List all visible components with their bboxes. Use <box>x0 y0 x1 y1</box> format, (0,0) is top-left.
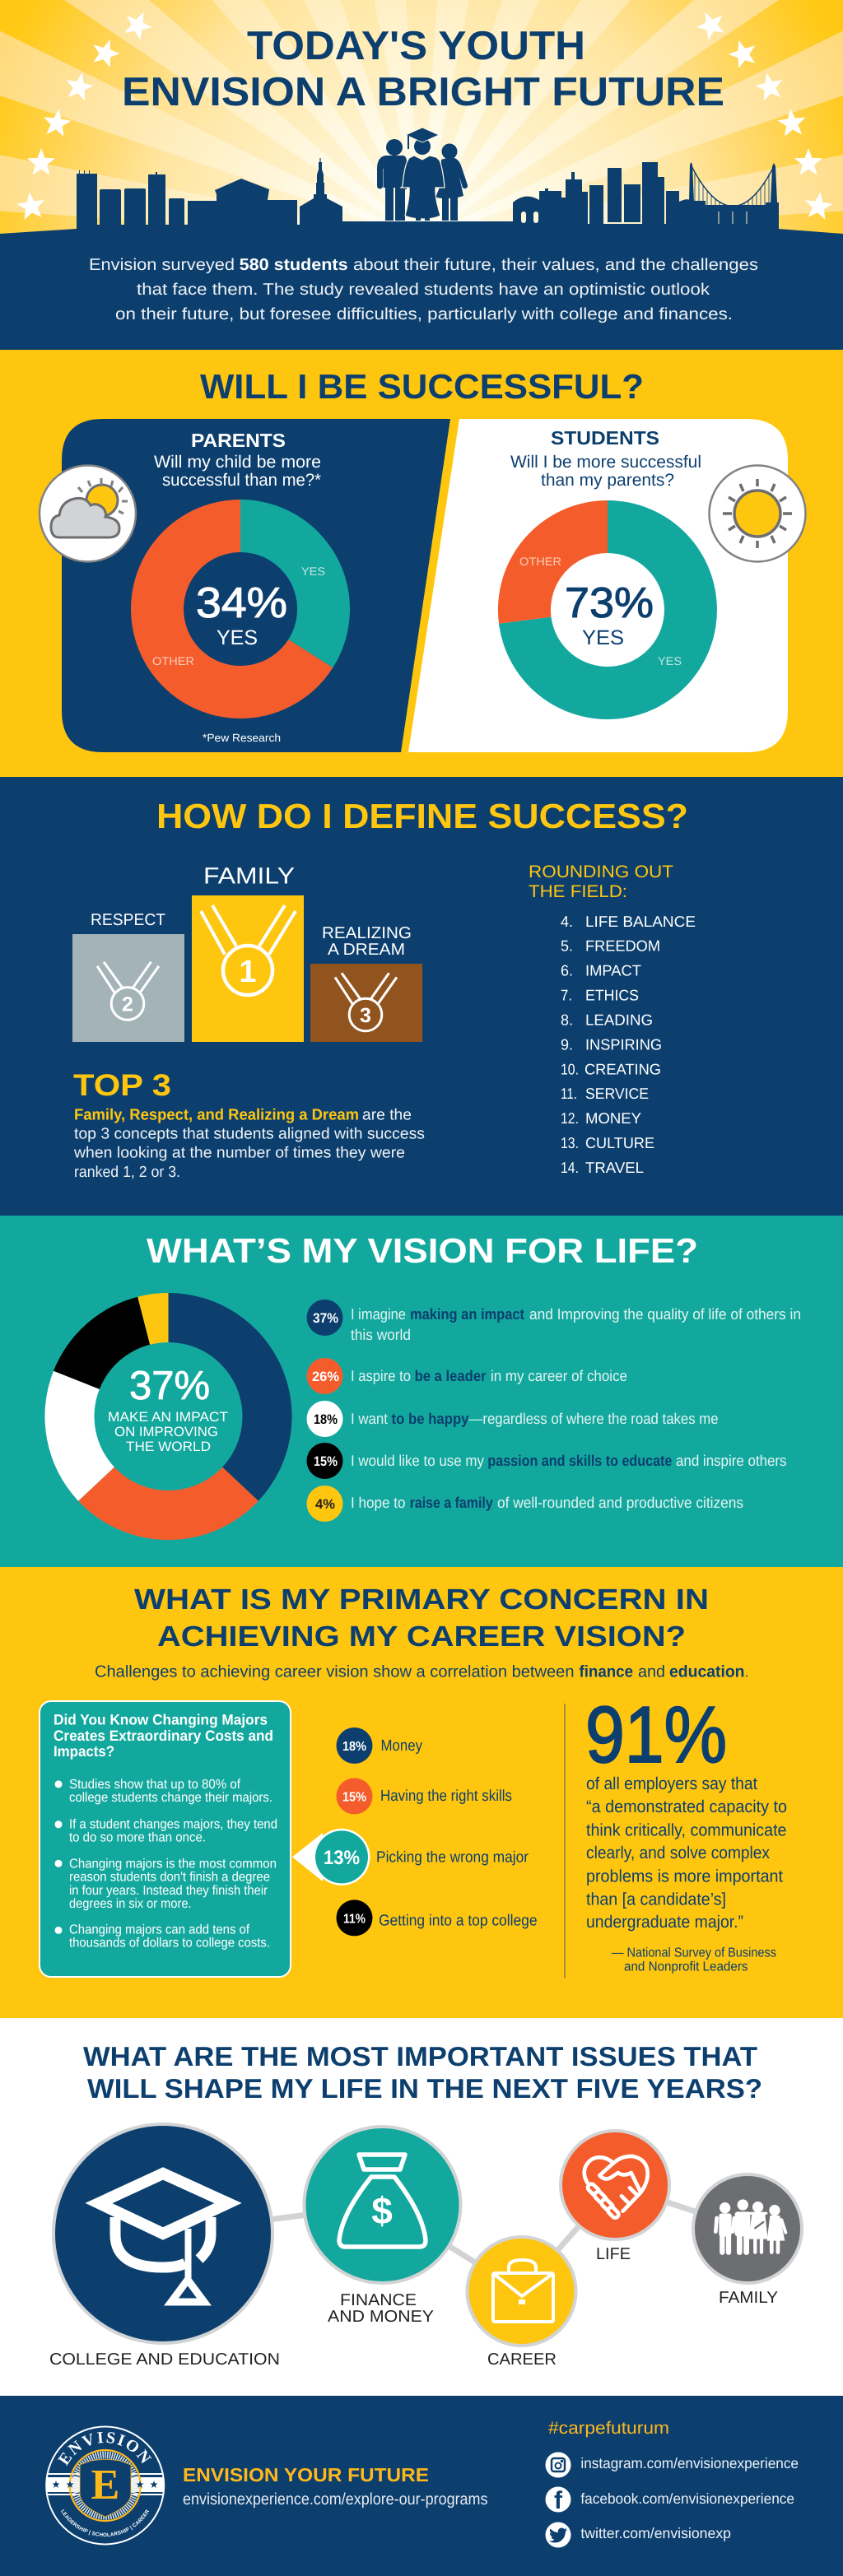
ranked list: 6. <box>561 962 573 979</box>
ranked list: SERVICE <box>585 1085 649 1102</box>
card bullets: college students change their majors. <box>69 1791 272 1805</box>
rounding out heading: THE FIELD: <box>529 882 627 901</box>
ranked list: 8. <box>561 1011 573 1029</box>
item 18% <box>306 1401 719 1437</box>
item 18%: to be happy <box>392 1410 469 1427</box>
ranked list: INSPIRING <box>585 1035 662 1053</box>
top 3 text: top 3 concepts that students aligned with success <box>74 1126 425 1142</box>
intro text: that face them. The study revealed students have an optimistic outlook <box>137 281 710 299</box>
logo badge: LEADERSHIP | SCHOLARSHIP | CAREER <box>61 2509 150 2536</box>
issue: finance and money <box>305 2127 461 2326</box>
top 3 text: are the <box>362 1106 412 1124</box>
ranked list: TRAVEL <box>585 1159 644 1176</box>
concern: getting into a top college 11%: Getting into a top college <box>379 1912 537 1929</box>
parents donut chart 34%: YES <box>301 565 325 578</box>
students donut chart 73%: YES <box>582 626 624 649</box>
icon: facebook: f <box>554 2487 563 2514</box>
intro text: 580 students <box>240 256 348 274</box>
top 3 text: Family, Respect, and Realizing a Dream <box>74 1106 359 1124</box>
hashtag: #carpefuturum <box>548 2419 669 2438</box>
issue: career <box>468 2237 576 2369</box>
section: vision for life <box>0 1216 843 1567</box>
instagram handle: instagram.com/envisionexperience <box>580 2455 799 2471</box>
donut chart: vision: ON IMPROVING <box>114 1425 218 1439</box>
heading: WHAT IS MY PRIMARY CONCERN IN <box>134 1583 709 1616</box>
section: will I be successful <box>0 350 843 777</box>
podium: realizing a dream <box>310 924 422 1042</box>
facebook handle: facebook.com/envisionexperience <box>580 2490 794 2507</box>
icon: facebook <box>545 2487 571 2514</box>
concern: getting into a top college 11%: 11% <box>343 1912 366 1926</box>
icon: family group <box>715 2199 785 2253</box>
ranked list: 14. <box>561 1159 579 1176</box>
concern: getting into a top college 11% <box>336 1899 537 1936</box>
parents donut chart 34%: YES <box>217 626 258 649</box>
title: TODAY'S YOUTH <box>247 24 585 68</box>
card heading: Impacts? <box>54 1743 114 1760</box>
section: how do I define success <box>0 777 843 1216</box>
card bullets: Changing majors is the most common <box>69 1858 277 1872</box>
heading: ACHIEVING MY CAREER VISION? <box>157 1620 686 1653</box>
rounding out heading <box>529 863 673 901</box>
students donut chart 73%: OTHER <box>519 555 561 568</box>
item 37%: 37% <box>313 1311 338 1326</box>
podium: realizing a dream: REALIZING <box>322 924 412 942</box>
icon: medal 2 <box>97 962 159 1020</box>
subtitle: Challenges to achieving career vision show a correlation between <box>95 1662 575 1681</box>
logo badge: E <box>91 2462 119 2509</box>
podium: family: FAMILY <box>203 863 295 889</box>
skyline left <box>77 158 342 227</box>
item 26%: 26% <box>312 1369 339 1384</box>
students heading: STUDENTS <box>551 427 659 449</box>
parents question: Will my child be more <box>154 453 321 472</box>
parents question: successful than me?* <box>162 471 321 490</box>
podium: realizing a dream: A DREAM <box>328 941 405 959</box>
ground and intro band <box>0 221 843 350</box>
item 15%: and inspire others <box>676 1452 787 1469</box>
card bullets: Studies show that up to 80% of <box>69 1778 241 1792</box>
ranked list: IMPACT <box>585 962 641 979</box>
item 37%: this world <box>351 1326 411 1343</box>
footer panel <box>0 2396 843 2576</box>
card heading: Creates Extraordinary Costs and <box>54 1727 273 1744</box>
heading <box>134 1583 709 1653</box>
logo badge <box>45 2426 165 2545</box>
top 3 text <box>73 1106 425 1181</box>
ranked list: CULTURE <box>585 1134 654 1151</box>
issue: career: CAREER <box>487 2350 557 2369</box>
ranked list: 12. <box>561 1109 579 1127</box>
stat 91%: 91% <box>585 1690 727 1779</box>
students donut chart 73%: 73% <box>565 579 654 627</box>
students question: Will I be more successful <box>510 453 701 472</box>
subtitle: and <box>638 1662 665 1681</box>
item 15%: passion and skills to educate <box>487 1452 672 1469</box>
header panel <box>0 0 843 350</box>
icon: twitter <box>545 2522 571 2548</box>
subtitle: . <box>745 1662 748 1681</box>
item 37% <box>306 1300 801 1343</box>
tagline: ENVISION YOUR FUTURE <box>183 2464 429 2485</box>
card bullets: Changing majors can add tens of <box>69 1923 250 1937</box>
item 26%: I aspire to <box>351 1367 411 1384</box>
card bullets: reason students don't finish a degree <box>69 1871 270 1885</box>
intro text: Envision surveyed <box>89 256 235 274</box>
item 15%: I would like to use my <box>351 1452 485 1469</box>
icon: medal 1: 1 <box>239 955 257 989</box>
item 18%: I want <box>351 1410 388 1427</box>
podium: respect <box>72 911 184 1042</box>
ranked list: LEADING <box>585 1011 653 1029</box>
podium: respect: RESPECT <box>91 911 165 929</box>
donut chart: vision: THE WORLD <box>126 1439 211 1454</box>
students question: than my parents? <box>541 471 674 490</box>
ranked list <box>561 913 696 1176</box>
icon: handshake heart <box>585 2156 648 2219</box>
item 18%: —regardless of where the road takes me <box>469 1410 719 1427</box>
ranked list: MONEY <box>585 1109 641 1127</box>
rounding out heading: ROUNDING OUT <box>529 863 673 881</box>
icon: graduation cap <box>99 2174 228 2302</box>
icon: instagram <box>545 2453 571 2477</box>
issue: college and education: COLLEGE AND EDUCATION <box>49 2350 280 2369</box>
quote attribution: — National Survey of Business <box>612 1946 776 1960</box>
icon: bag <box>493 2260 553 2322</box>
program url: envisionexperience.com/explore-our-programs <box>183 2490 487 2509</box>
skyline right with bridge <box>513 162 779 229</box>
quote attribution: and Nonprofit Leaders <box>624 1960 748 1974</box>
issue: finance and money: AND MONEY <box>328 2308 434 2326</box>
subtitle: education <box>669 1662 744 1681</box>
panel: did you know card <box>40 1701 291 1977</box>
section: most important issues <box>0 2018 843 2396</box>
icon: medal 3 <box>335 973 397 1031</box>
issue: college and education <box>49 2124 280 2369</box>
footnote: *Pew Research <box>203 732 281 744</box>
title: ENVISION A BRIGHT FUTURE <box>122 70 724 114</box>
title <box>122 24 724 114</box>
intro text <box>89 256 758 323</box>
twitter handle: twitter.com/envisionexp <box>580 2525 731 2541</box>
top 3 heading: TOP 3 <box>73 1068 171 1102</box>
ranked list: 11. <box>561 1085 577 1102</box>
ranked list: 7. <box>561 987 572 1004</box>
quote attribution <box>612 1946 776 1974</box>
concern: having the right skills 15% <box>336 1778 512 1814</box>
employer quote: of all employers say that <box>586 1774 757 1793</box>
item 26%: in my career of choice <box>491 1367 627 1384</box>
item 4%: 4% <box>315 1497 335 1512</box>
card bullets: If a student changes majors, they tend <box>69 1817 277 1831</box>
item 26%: be a leader <box>415 1367 487 1384</box>
item 4%: I hope to <box>351 1494 405 1511</box>
intro text: about their future, their values, and the challenges <box>353 256 758 274</box>
logo badge: ENVISION <box>58 2432 151 2466</box>
icon: medal 3: 3 <box>360 1004 371 1027</box>
employer quote <box>586 1774 787 1932</box>
ranked list: 13. <box>561 1134 579 1151</box>
heading: WILL I BE SUCCESSFUL? <box>200 367 644 406</box>
parents donut chart 34% <box>131 500 350 718</box>
concern: picking the wrong major 13% callout <box>292 1829 529 1886</box>
issue: life <box>561 2131 669 2263</box>
item 4%: raise a family <box>410 1494 493 1511</box>
parents donut chart 34%: OTHER <box>152 654 194 667</box>
donut chart: vision: MAKE AN IMPACT <box>108 1410 228 1425</box>
section: primary concern <box>0 1567 843 2018</box>
card bullets: degrees in six or more. <box>69 1897 191 1911</box>
issue: family: FAMILY <box>719 2289 778 2307</box>
issue: family <box>693 2174 802 2307</box>
concern: money 18% <box>336 1727 422 1764</box>
donut chart: vision: 37% <box>129 1364 210 1408</box>
employer quote: undergraduate major.” <box>586 1913 743 1932</box>
heading: WHAT’S MY VISION FOR LIFE? <box>147 1231 698 1270</box>
panel: parents <box>62 419 450 752</box>
card bullets: to do so more than once. <box>69 1830 206 1845</box>
employer quote: think critically, communicate <box>586 1820 787 1839</box>
podium: family <box>192 863 304 1042</box>
item 18%: 18% <box>314 1412 338 1427</box>
icon: medal 2: 2 <box>122 993 133 1016</box>
subtitle: finance <box>580 1662 633 1681</box>
ranked list: LIFE BALANCE <box>585 913 696 930</box>
ranked list: 4. <box>561 913 573 930</box>
concern: money 18%: Money <box>380 1737 422 1755</box>
issue: finance and money: FINANCE <box>340 2291 417 2309</box>
employer quote: than [a candidate’s] <box>586 1890 726 1909</box>
card bullets: thousands of dollars to college costs. <box>69 1936 270 1950</box>
intro text: on their future, but foresee difficulties, particularly with college and finances. <box>115 305 733 323</box>
ranked list: CREATING <box>585 1060 661 1077</box>
ranked list: 9. <box>561 1035 573 1053</box>
employer quote: clearly, and solve complex <box>586 1844 770 1862</box>
ranked list: ETHICS <box>585 987 639 1004</box>
icon: money bag: $ <box>371 2189 393 2232</box>
icon: cloud and sun <box>40 466 136 561</box>
heading: WHAT ARE THE MOST IMPORTANT ISSUES THAT <box>83 2041 757 2071</box>
stars arc left and right <box>16 6 834 221</box>
parents heading: PARENTS <box>191 430 286 451</box>
card heading <box>54 1712 273 1760</box>
donut chart: vision <box>44 1293 292 1540</box>
concern: picking the wrong major 13% callout: Picking the wrong major <box>376 1848 529 1867</box>
concern: picking the wrong major 13% callout: 13% <box>324 1847 360 1869</box>
students question <box>510 453 701 490</box>
ranked list: FREEDOM <box>585 937 660 955</box>
ranked list: 10. <box>561 1060 579 1077</box>
item 15% <box>306 1443 787 1479</box>
card bullets: in four years. Instead they finish their <box>69 1884 268 1898</box>
card bullets <box>54 1778 277 1950</box>
item 37%: and Improving the quality of life of others in <box>529 1305 801 1323</box>
item 4%: of well-rounded and productive citizens <box>497 1494 743 1511</box>
top 3 text: ranked 1, 2 or 3. <box>74 1164 180 1181</box>
panel: students <box>408 419 788 752</box>
students donut chart 73% <box>498 500 717 719</box>
item 37%: I imagine <box>351 1305 406 1323</box>
heading <box>83 2041 762 2104</box>
item 26% <box>306 1358 627 1394</box>
heading: WILL SHAPE MY LIFE IN THE NEXT FIVE YEARS? <box>87 2073 762 2104</box>
issue: life: LIFE <box>596 2245 631 2263</box>
icon: money bag <box>339 2155 426 2247</box>
top 3 text: when looking at the number of times they were <box>73 1144 405 1162</box>
ranked list: 5. <box>561 937 573 955</box>
employer quote: problems is more important <box>586 1867 783 1886</box>
concern: money 18%: 18% <box>342 1740 366 1754</box>
concern: having the right skills 15%: Having the right skills <box>380 1788 512 1805</box>
icon: medal 1 <box>201 905 296 995</box>
item 37%: making an impact <box>410 1305 524 1323</box>
card heading: Did You Know Changing Majors <box>54 1712 268 1728</box>
item 15%: 15% <box>314 1454 338 1469</box>
icon: sun <box>710 466 805 561</box>
family silhouette with graduate <box>377 128 468 221</box>
item 4% <box>306 1486 743 1522</box>
concern: having the right skills 15%: 15% <box>342 1791 366 1804</box>
students donut chart 73%: YES <box>658 654 682 667</box>
parents donut chart 34%: 34% <box>196 579 287 627</box>
employer quote: “a demonstrated capacity to <box>586 1797 787 1816</box>
heading: HOW DO I DEFINE SUCCESS? <box>156 797 688 835</box>
parents question <box>154 453 321 490</box>
